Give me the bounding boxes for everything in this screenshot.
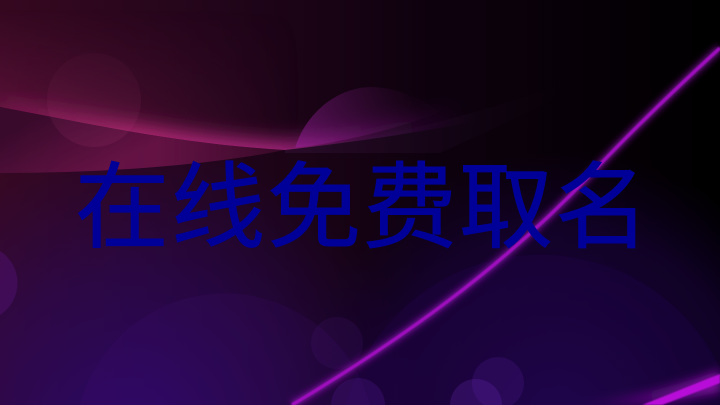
small bubbles	[311, 317, 524, 405]
bubble: left edge	[0, 251, 18, 315]
bubble: large bottom left	[80, 293, 370, 405]
bubble: top centre	[295, 87, 440, 148]
light streak: main arc	[292, 48, 720, 405]
bubble: top left	[47, 53, 141, 147]
curved band: left	[0, 107, 285, 173]
light streak: bottom right	[570, 370, 720, 405]
pink glow above the curve	[0, 37, 448, 150]
bubble: large bottom right	[346, 255, 720, 405]
title: 在线免费取名	[75, 155, 649, 260]
curved band: right	[285, 70, 600, 153]
